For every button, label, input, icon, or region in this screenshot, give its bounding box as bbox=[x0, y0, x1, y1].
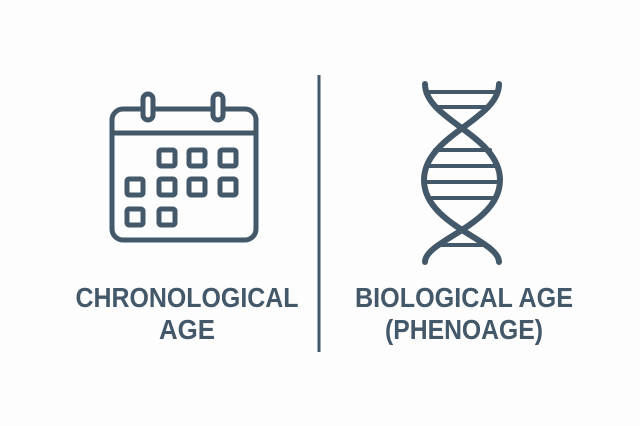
label: chronological age bbox=[76, 282, 298, 345]
label: biological age: (PHENOAGE) bbox=[385, 314, 543, 345]
label: biological age bbox=[355, 282, 573, 345]
icon: calendar bbox=[112, 94, 256, 240]
divider bbox=[318, 75, 320, 352]
label: biological age: BIOLOGICAL AGE bbox=[355, 282, 573, 313]
icon: DNA helix bbox=[424, 84, 500, 262]
label: chronological age: AGE bbox=[159, 314, 215, 345]
label: chronological age: CHRONOLOGICAL bbox=[76, 282, 298, 313]
